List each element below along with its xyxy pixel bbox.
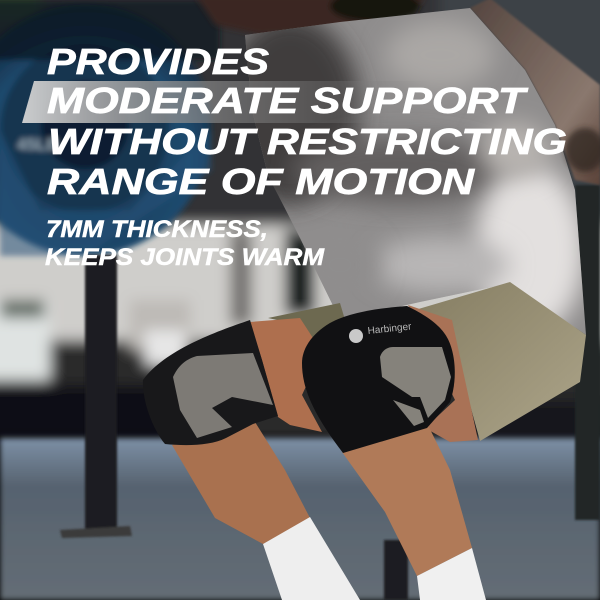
thigh right	[408, 305, 478, 442]
rack posts	[60, 185, 600, 600]
floor	[0, 438, 600, 600]
knee sleeve left	[143, 320, 278, 445]
right shorts	[415, 282, 586, 441]
shirt	[245, 8, 586, 335]
subheading: 7MM THICKNESS,	[46, 216, 268, 243]
brand logo: Harbinger	[367, 321, 413, 337]
arm	[470, 0, 600, 185]
lower leg right	[342, 425, 472, 576]
brand logo	[349, 321, 413, 343]
sleeve right lower gray panel	[393, 400, 424, 426]
weight plate	[0, 0, 220, 256]
sleeve right gray panel	[380, 347, 451, 418]
headline	[47, 41, 567, 202]
highlight banner	[22, 81, 430, 123]
arm speckle	[565, 128, 600, 172]
subheading	[45, 216, 325, 271]
headline: RANGE OF MOTION	[47, 161, 475, 202]
knee sleeve right	[302, 306, 455, 453]
subheading: KEEPS JOINTS WARM	[45, 244, 325, 271]
head and beard	[195, 0, 425, 35]
weight plate: 45LB	[17, 135, 59, 154]
headline: MODERATE SUPPORT	[47, 80, 529, 121]
thigh left	[250, 318, 322, 432]
headline: WITHOUT RESTRICTING	[48, 121, 567, 162]
headline: PROVIDES	[47, 41, 269, 82]
lower leg left	[172, 422, 310, 544]
sock left	[263, 517, 360, 600]
left shorts	[268, 303, 348, 352]
sock right	[417, 548, 486, 600]
blurred gym background	[0, 0, 600, 445]
sleeve left gray panel	[173, 353, 273, 438]
